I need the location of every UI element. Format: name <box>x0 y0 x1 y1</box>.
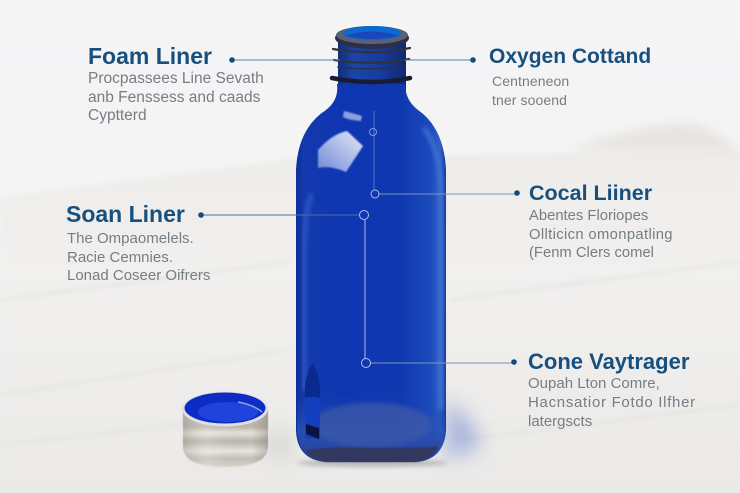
label: Cone Vaytrager <box>528 349 696 430</box>
leader line: Soan Liner <box>198 210 368 220</box>
leader line: Cocal Liiner <box>370 111 520 198</box>
text: Foam Liner description <box>88 70 264 124</box>
leader line: Foam Liner <box>229 57 340 63</box>
bottle base glass <box>297 392 445 462</box>
text: Cocal Liiner description: Ollticicn omonpatling <box>529 226 673 242</box>
text: Cone Vaytrager description: latergscts <box>528 413 592 430</box>
text: Oxygen Cottand description: tner sooend <box>492 92 567 108</box>
reflection: left window <box>318 131 363 172</box>
text: Oxygen Cottand description: Centneneon <box>492 73 569 89</box>
text: Cocal Liiner description <box>529 208 673 261</box>
text: Cone Vaytrager description <box>528 375 696 430</box>
text: Soan Liner description: The Ompaomelels. <box>67 230 194 247</box>
text: Soan Liner description: Racie Cemnies. <box>67 248 173 266</box>
icon: open metal cap <box>182 392 268 467</box>
text: Cone Vaytrager description: Oupah Lton Comre, <box>528 375 660 392</box>
text: Soan Liner description <box>67 230 210 284</box>
label: Foam Liner <box>88 43 264 124</box>
text: Cocal Liiner description: (Fenm Clers comel <box>529 245 654 261</box>
text: Cocal Liiner description: Abentes Floriopes <box>529 208 648 224</box>
label: Cocal Liiner <box>529 181 673 261</box>
heading: Soan Liner: Soan Liner <box>66 201 185 227</box>
heading: Foam Liner: Foam Liner <box>88 43 212 69</box>
text: Oxygen Cottand description <box>492 73 569 108</box>
label: Oxygen Cottand <box>489 45 651 108</box>
text: Foam Liner description: anb Fenssess and caads <box>88 88 260 106</box>
leader line: Cone Vaytrager <box>362 220 517 368</box>
text: Foam Liner description: Cyptterd <box>88 107 147 124</box>
label: Soan Liner <box>66 201 210 284</box>
leader line: Oxygen Cottand <box>405 57 476 63</box>
text: Foam Liner description: Procpassees Line Sevath <box>88 70 264 87</box>
bottle mouth <box>335 27 409 49</box>
heading: Oxygen Cottand: Oxygen Cottand <box>489 45 651 68</box>
heading: Cocal Liiner: Cocal Liiner <box>529 181 652 205</box>
bottle <box>296 26 446 462</box>
heading: Cone Vaytrager: Cone Vaytrager <box>528 349 689 374</box>
text: Soan Liner description: Lonad Coseer Oifrers <box>67 267 210 284</box>
bottle body <box>296 84 446 462</box>
text: Cone Vaytrager description: Hacnsatior Fotdo Ilfher <box>528 394 696 411</box>
bottle neck <box>328 40 416 110</box>
reflection: lower slot <box>305 364 320 439</box>
neck thread rings <box>332 48 410 82</box>
